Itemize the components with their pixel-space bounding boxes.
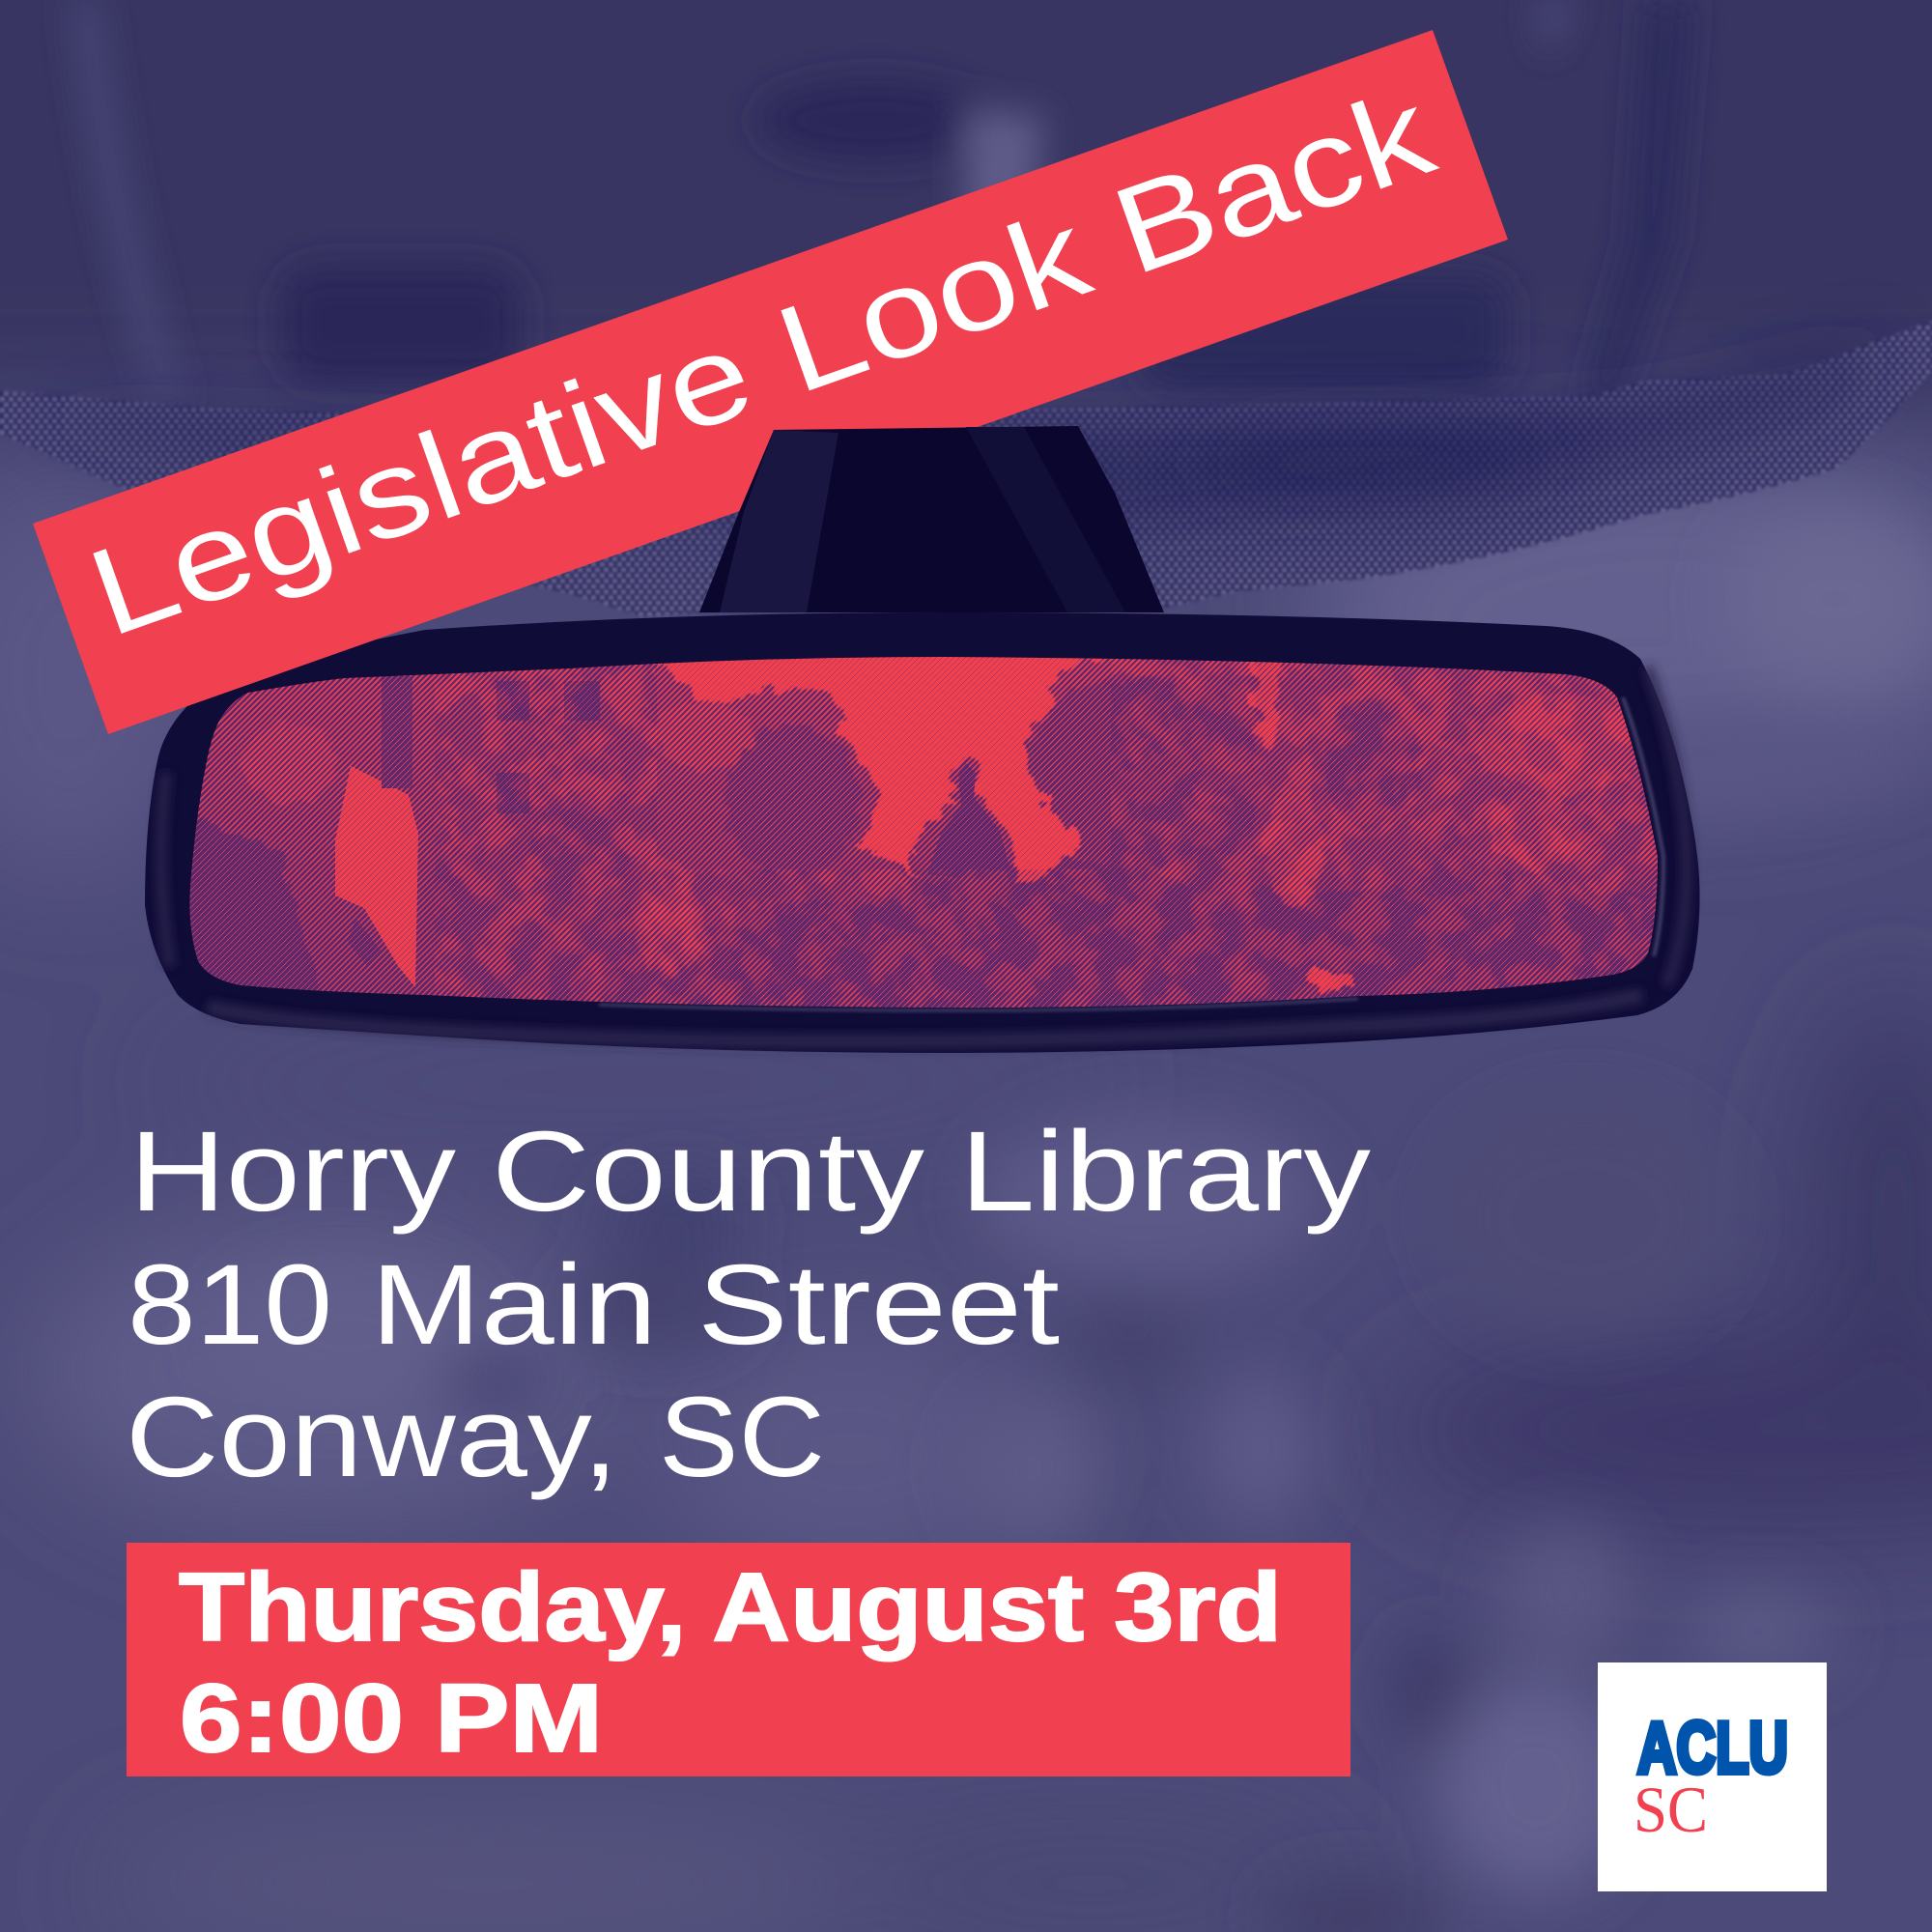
lower dark <box>734 903 1236 1019</box>
bright sky <box>653 638 1108 886</box>
line: venue name: County <box>492 1108 924 1236</box>
banner title text: Legislative Look Back <box>73 63 1450 663</box>
ACLU SC logo <box>1598 1662 1827 1891</box>
date: Thursday, August 3rd <box>179 1553 1282 1662</box>
line: street: Street <box>697 1241 1060 1369</box>
line: street: 810 <box>128 1241 332 1369</box>
line: city <box>126 1374 825 1501</box>
mirror mount <box>699 426 1164 612</box>
mirror reflection: line-screen capitol and trees <box>189 657 1658 1009</box>
line: city: SC <box>659 1374 825 1501</box>
time: 6:00 PM <box>180 1664 603 1773</box>
line: street <box>128 1241 1060 1369</box>
rear-view mirror <box>145 612 1700 1053</box>
venue address <box>126 1108 1371 1501</box>
line: venue name: Horry <box>129 1108 456 1236</box>
line: city: Conway, <box>126 1374 618 1501</box>
lighter <box>1478 696 1652 792</box>
line: street: Main <box>371 1241 657 1369</box>
windshield dotted frit band <box>0 321 1932 616</box>
mirror frame <box>145 612 1700 1053</box>
logo wordmark: ACLU <box>1637 1707 1788 1788</box>
logo state: SC <box>1634 1773 1708 1846</box>
line: venue name: Library <box>960 1108 1371 1236</box>
line: venue name <box>129 1108 1371 1236</box>
date and time box <box>127 1543 1350 1776</box>
banner: Legislative Look Back <box>33 30 1508 734</box>
building <box>335 766 418 987</box>
